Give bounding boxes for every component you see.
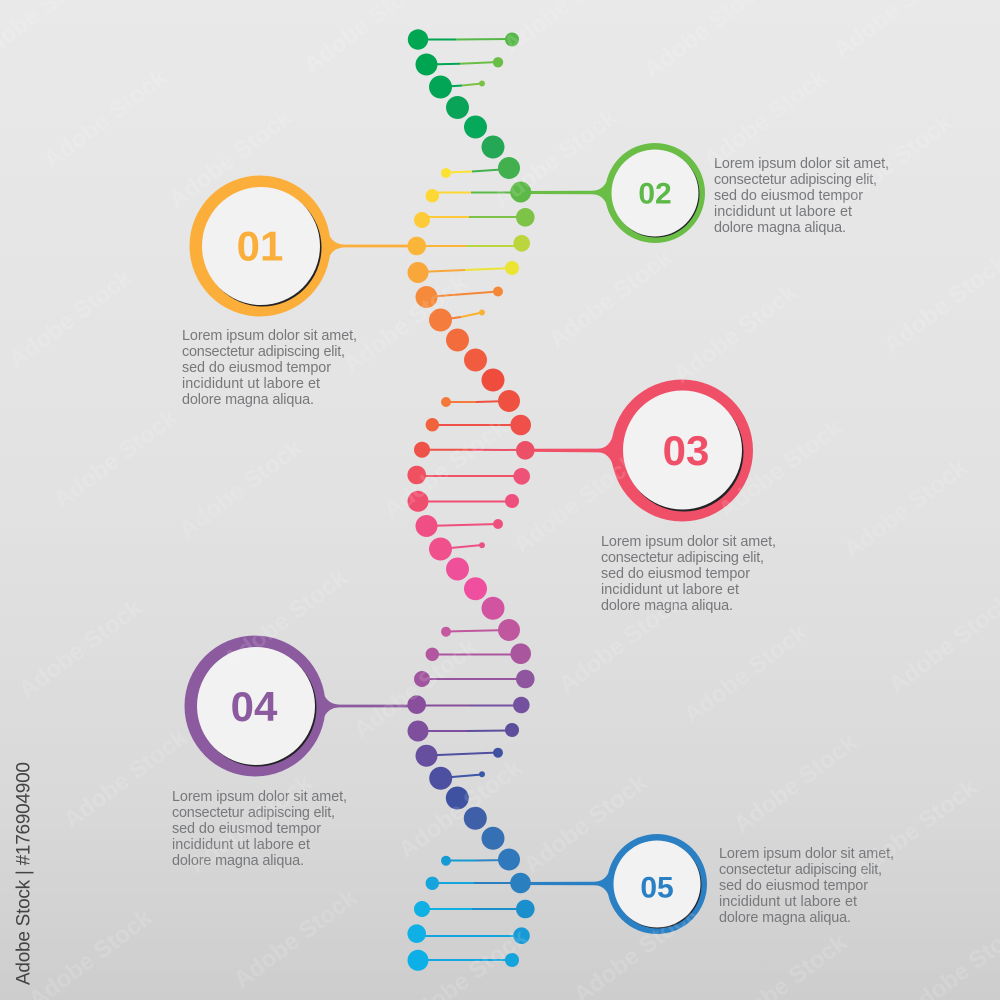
watermark grid: Adobe Stock <box>174 434 308 544</box>
watermark grid: Adobe Stock <box>59 724 193 834</box>
text block 01: consectetur adipiscing elit, <box>182 344 345 360</box>
text block 04: Lorem ipsum dolor sit amet, <box>172 789 347 805</box>
text block 04: incididunt ut labore et <box>172 837 310 853</box>
text block 03: dolore magna aliqua. <box>601 598 733 614</box>
watermark grid: Adobe Stock <box>849 774 983 884</box>
watermark grid: Adobe Stock <box>699 64 833 174</box>
watermark grid: Adobe Stock <box>184 769 318 879</box>
watermark grid: Adobe Stock <box>39 64 173 174</box>
watermark grid: Adobe Stock <box>379 414 513 524</box>
text block 02: incididunt ut labore et <box>714 204 852 220</box>
dna helix <box>407 29 535 971</box>
callout 01: 01 <box>237 222 283 270</box>
text block 01: incididunt ut labore et <box>182 376 320 392</box>
watermark grid: Adobe Stock <box>229 884 363 994</box>
watermark grid: Adobe Stock <box>394 754 528 864</box>
text block 01: Lorem ipsum dolor sit amet, <box>182 328 357 344</box>
watermark grid: Adobe Stock <box>729 729 863 839</box>
callout 04: 04 <box>231 683 278 730</box>
watermark grid: Adobe Stock <box>669 279 803 389</box>
watermark grid: Adobe Stock <box>714 414 848 524</box>
text block 02: dolore magna aliqua. <box>714 220 846 236</box>
text block 03: consectetur adipiscing elit, <box>601 550 764 566</box>
text block 05: dolore magna aliqua. <box>719 910 851 926</box>
text block 02: consectetur adipiscing elit, <box>714 172 877 188</box>
watermark grid: Adobe Stock <box>509 449 643 559</box>
watermark grid: Adobe Stock <box>824 109 958 219</box>
callout 05 <box>520 834 707 934</box>
callout 02: 02 <box>638 178 672 210</box>
callout 02 <box>520 143 705 243</box>
watermark grid: Adobe Stock <box>679 619 813 729</box>
callout 04 <box>184 636 408 776</box>
text block 04: sed do eiusmod tempor <box>172 821 321 837</box>
text block 02: sed do eiusmod tempor <box>714 188 863 204</box>
helix turn: green to orange <box>407 29 535 392</box>
callout 01 <box>190 176 408 316</box>
text block 03: incididunt ut labore et <box>601 582 739 598</box>
text block 01: sed do eiusmod tempor <box>182 360 331 376</box>
watermark grid: Adobe Stock <box>839 454 973 564</box>
watermark grid: Adobe Stock <box>219 564 353 674</box>
text block 05: sed do eiusmod tempor <box>719 878 868 894</box>
text block 04: consectetur adipiscing elit, <box>172 805 335 821</box>
text block 03: sed do eiusmod tempor <box>601 566 750 582</box>
text block 04: dolore magna aliqua. <box>172 853 304 869</box>
text block 05: Lorem ipsum dolor sit amet, <box>719 846 894 862</box>
watermark grid: Adobe Stock <box>349 634 483 744</box>
text block 02: Lorem ipsum dolor sit amet, <box>714 156 889 172</box>
callout 03: 03 <box>663 427 709 474</box>
helix turn: red to pink <box>407 390 535 688</box>
text block 05: incididunt ut labore et <box>719 894 857 910</box>
watermark grid: Adobe Stock <box>164 104 298 214</box>
text block 05: consectetur adipiscing elit, <box>719 862 882 878</box>
watermark grid: Adobe Stock <box>49 404 183 514</box>
watermark grid: Adobe Stock <box>14 594 148 704</box>
watermark grid: Adobe Stock <box>339 269 473 379</box>
watermark grid: Adobe Stock <box>489 104 623 214</box>
stock id vertical label: Adobe Stock | #176904900 <box>14 762 34 985</box>
watermark grid: Adobe Stock <box>4 264 138 374</box>
callout 03 <box>525 380 753 522</box>
text block 01: dolore magna aliqua. <box>182 392 314 408</box>
watermark grid: Adobe Stock <box>544 244 678 354</box>
text block 03: Lorem ipsum dolor sit amet, <box>601 534 776 550</box>
watermark grid: Adobe Stock <box>519 769 653 879</box>
callout 05: 05 <box>640 872 674 904</box>
watermark grid: Adobe Stock <box>554 589 688 699</box>
helix turn: purple to blue <box>407 695 535 971</box>
